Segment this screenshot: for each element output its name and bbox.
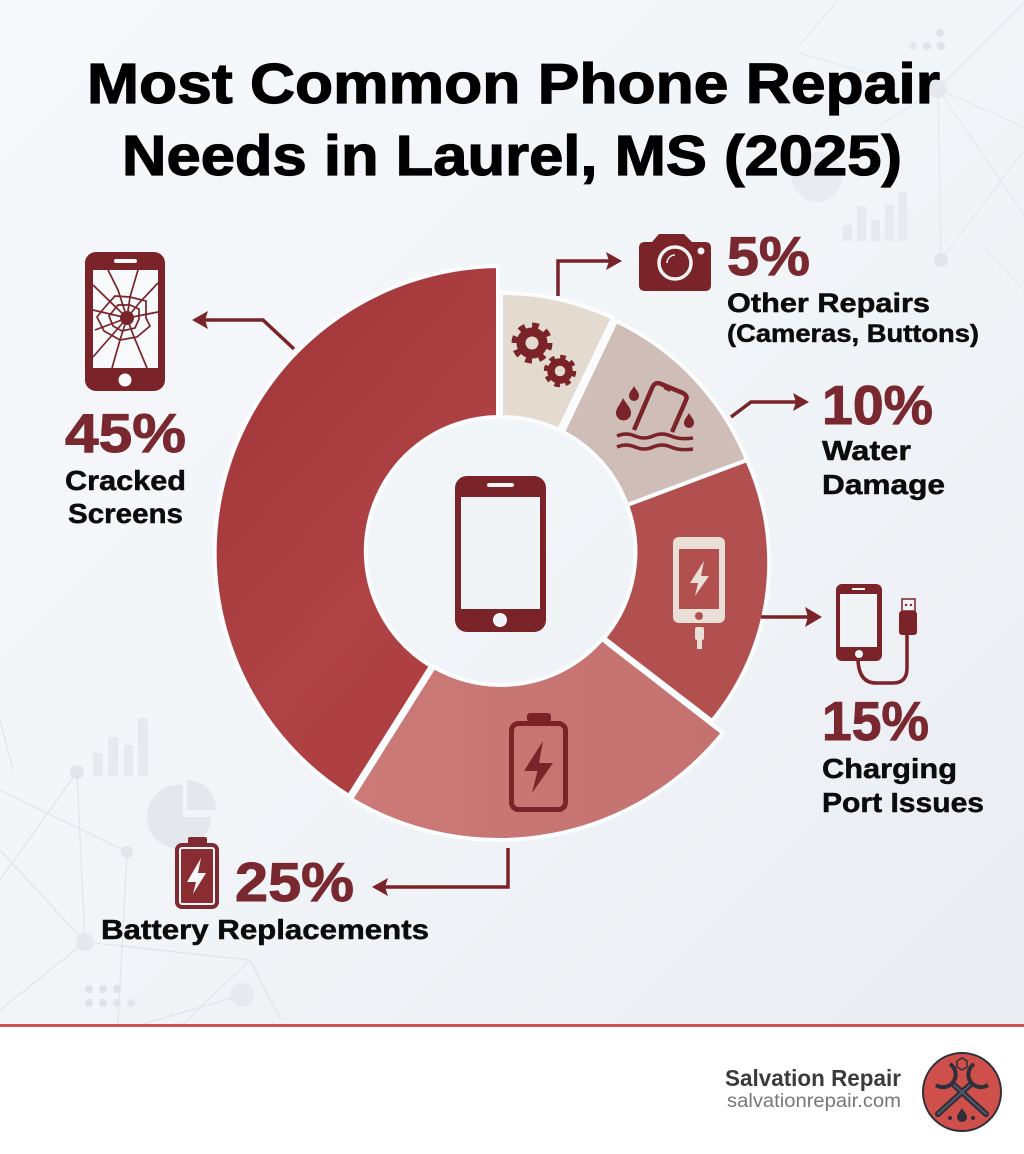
arrow: cracked screens [192, 311, 294, 349]
callout: water damage: Water [822, 435, 911, 466]
callout: battery replacements: Battery Replacements [101, 914, 429, 945]
brand text [725, 1065, 901, 1112]
arrow: charging port [761, 607, 822, 627]
callout: charging port issues: Port Issues [822, 787, 984, 818]
icon: gears [515, 326, 574, 384]
icon: water damage phone [616, 383, 694, 450]
callout: cracked screens: Cracked [65, 465, 186, 496]
decorative network top right [792, 0, 1024, 290]
segment: charging 15% [604, 460, 769, 721]
callout: charging port issues: 15% [822, 690, 929, 752]
callout: charging port issues: Charging [822, 753, 957, 784]
callout: other repairs: 5% [727, 225, 810, 287]
callout: water damage: 10% [822, 374, 933, 436]
title: Needs in Laurel, MS (2025) [122, 124, 902, 188]
icon: charging phone in segment [673, 537, 725, 649]
arrow: water damage [731, 393, 809, 417]
icon: small battery [175, 837, 219, 909]
donut chart [215, 266, 769, 840]
callout: battery replacements [101, 837, 429, 945]
callout: charging port issues [822, 584, 984, 818]
callout: other repairs: (Cameras, Buttons) [727, 320, 979, 348]
callout: cracked screens: Screens [68, 498, 183, 529]
logo [923, 1053, 1001, 1131]
icon: camera [639, 234, 711, 291]
callout: cracked screens: 45% [65, 402, 186, 464]
callout: battery replacements: 25% [235, 851, 354, 913]
callout: cracked screens [65, 252, 186, 529]
title: Most Common Phone Repair [87, 52, 940, 116]
icon: center phone [455, 476, 546, 632]
footer rule [0, 1024, 1024, 1027]
callout: other repairs [639, 225, 979, 348]
segment: battery 25% [351, 639, 723, 840]
decorative network bottom left [0, 718, 281, 1024]
segment: other 5% [501, 293, 613, 430]
brand text: Salvation Repair [725, 1065, 901, 1091]
arrow: battery replacements [372, 848, 508, 896]
title [87, 52, 940, 188]
icon: battery in segment [512, 713, 566, 810]
icon: cracked phone [85, 252, 165, 391]
arrow: other repairs [558, 252, 622, 296]
segment: water 10% [563, 321, 747, 505]
callout: other repairs: Other Repairs [727, 288, 930, 318]
brand text: salvationrepair.com [727, 1091, 901, 1112]
callout: water damage [822, 374, 945, 500]
callout: water damage: Damage [822, 469, 945, 500]
segment: cracked screens 45% [215, 266, 498, 796]
footer panel [0, 1027, 1024, 1154]
icon: phone with usb cable [836, 584, 917, 683]
